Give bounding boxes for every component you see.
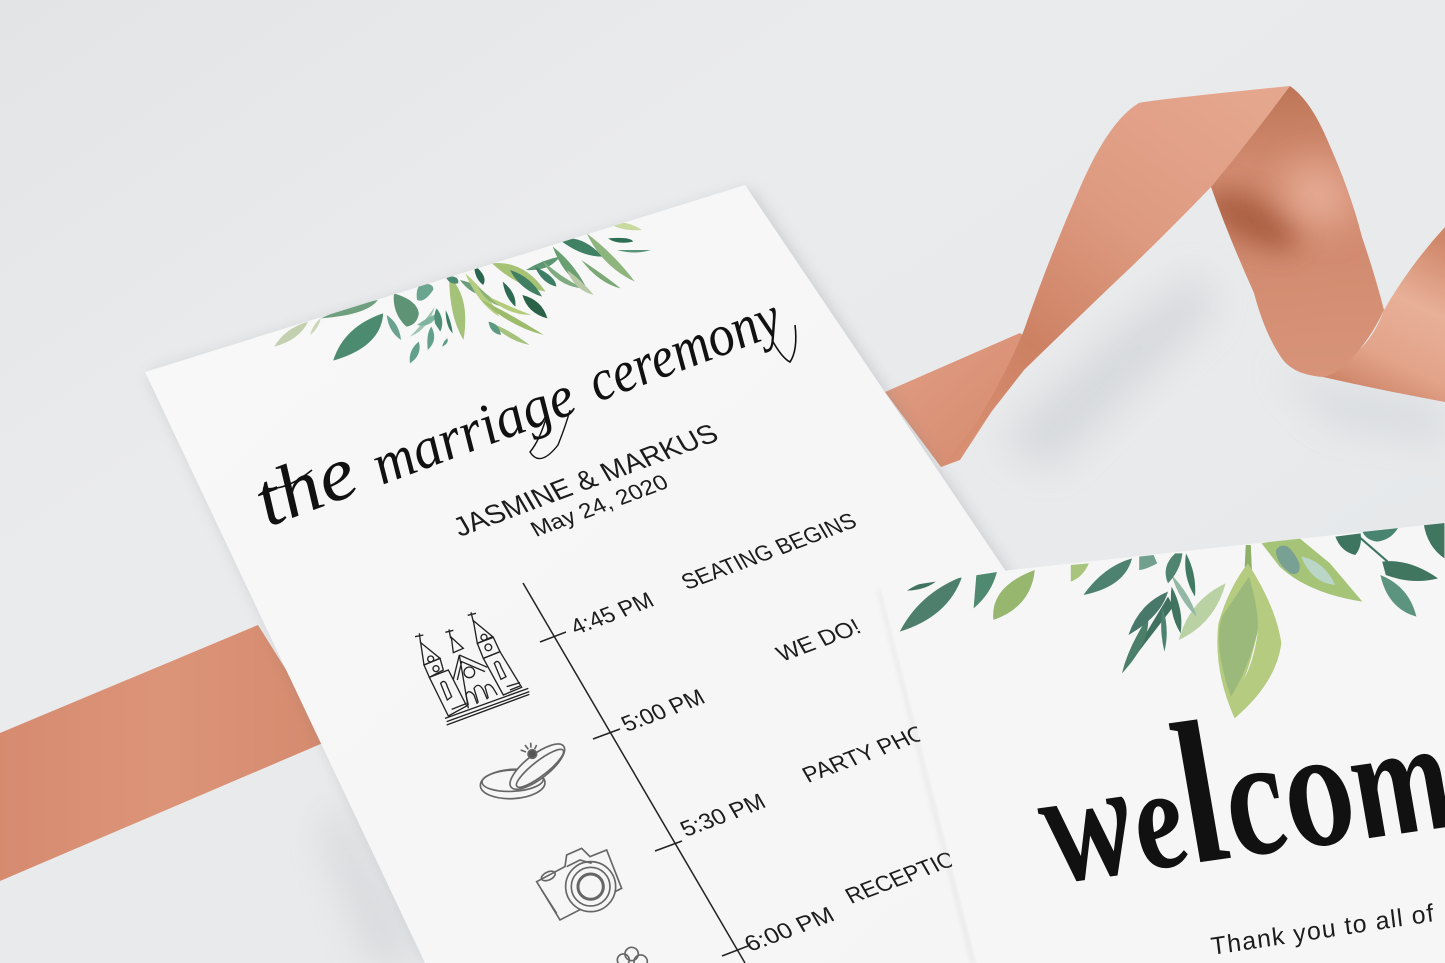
ribbon: second descending band [1211, 86, 1384, 377]
timeline axis [523, 583, 748, 963]
ribbon: rising section behind the card [885, 333, 1035, 467]
body text: thank you: Thank you to all of [1209, 899, 1436, 961]
times [565, 587, 839, 956]
date: May 24, 2020 [526, 470, 673, 541]
icon: reception, partly cropped [617, 947, 647, 963]
times: 6:00 PM [739, 902, 839, 956]
ribbon: third band at right [1323, 227, 1445, 402]
events: RECEPTION [840, 840, 975, 908]
title: the marriage ceremony: marriage [361, 363, 585, 497]
icon: camera [537, 848, 622, 920]
card shadow [150, 190, 1030, 963]
ribbon: first rising band [941, 86, 1290, 467]
ribbon: left section [0, 625, 330, 881]
foliage garland: top of ceremony card [274, 222, 651, 364]
panel: ceremony program card [145, 185, 1010, 963]
foliage garland: top of welcome card [900, 522, 1444, 718]
events: SEATING BEGINS [676, 508, 861, 594]
shadow from welcome card [877, 590, 975, 963]
times: 5:30 PM [675, 788, 770, 841]
events: PARTY PHOTOS [797, 704, 974, 787]
title: the marriage ceremony: ceremony [577, 284, 791, 414]
events [676, 508, 975, 908]
icon: church [415, 612, 529, 725]
events: WE DO! [771, 614, 865, 666]
lower-left shadow beside the card [320, 800, 425, 963]
title: the marriage ceremony [240, 284, 796, 542]
panel: welcome card [882, 522, 1445, 963]
times: 4:45 PM [565, 587, 658, 639]
heading: couple names: JASMINE & MARKUS [447, 418, 724, 542]
title: the marriage ceremony: the [240, 429, 369, 542]
icon: wedding rings [480, 737, 571, 800]
ribbon shadow on surface [1000, 270, 1445, 470]
times: 5:00 PM [616, 684, 709, 736]
